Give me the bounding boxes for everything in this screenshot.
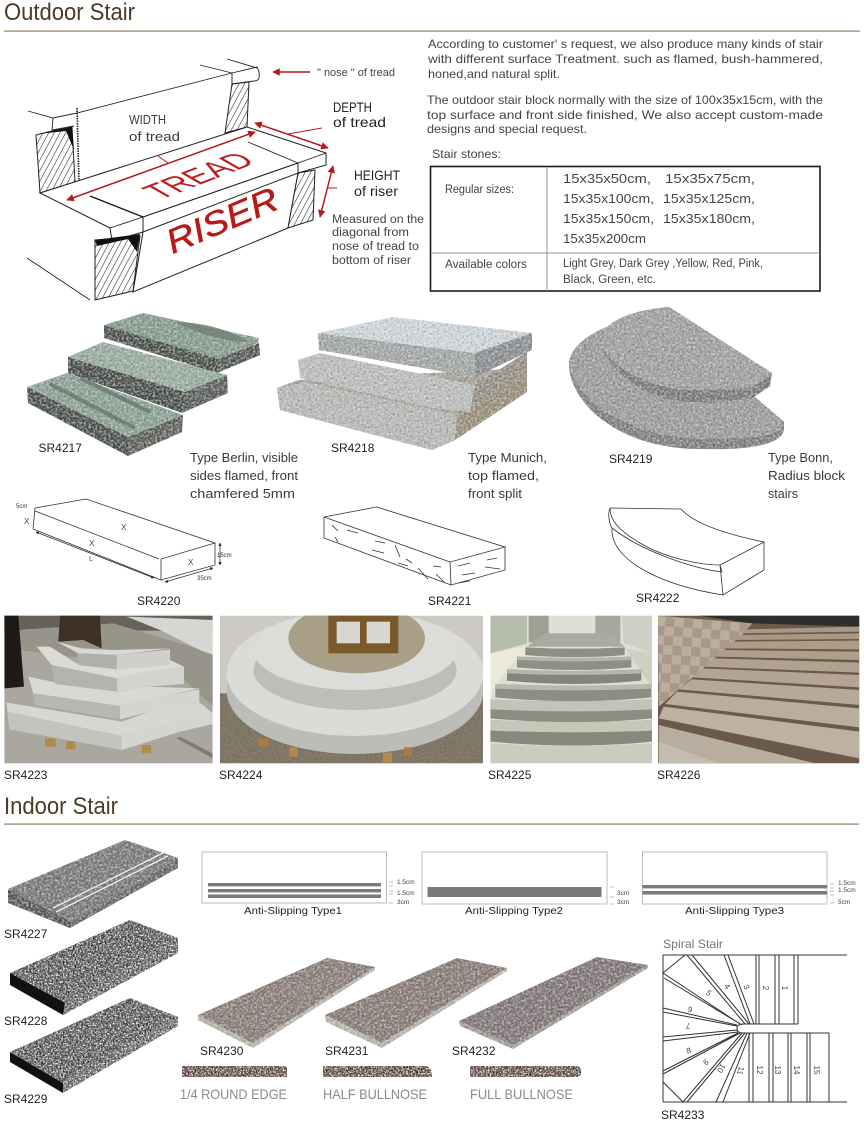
stair plan lines (663, 955, 847, 1102)
callout: depth of tread (333, 99, 386, 130)
edge profile: half bullnose (323, 1066, 432, 1102)
photo: SR4227 tread with anti-slip lines (8, 840, 178, 928)
photo: SR4223 stepped stair assembly (4, 616, 213, 763)
text block: surface treatments (427, 37, 823, 81)
table: stair stone sizes and colors: 15x35x100cm, (563, 191, 654, 206)
label: SR4226: SR4226 (657, 768, 701, 782)
photo: SR4230 brown tread (198, 958, 375, 1048)
photo: SR4228 dark speckled tread (10, 920, 178, 1015)
photo: SR4224 curved stair assembly (220, 603, 483, 763)
label: SR4217: SR4217 (38, 441, 82, 455)
diagram: Anti-Slipping Type2: 3cm (617, 899, 629, 906)
step numbers: 8 (685, 1045, 692, 1055)
edge profile: half bullnose: HALF BULLNOSE (323, 1086, 427, 1102)
caption: Type Munich (468, 450, 547, 501)
label: SR4228: SR4228 (4, 1014, 48, 1028)
note: riser measurement: nose of tread to (332, 241, 419, 253)
text block: standard block size: top surface and front side finished, We also accept custom-made (427, 108, 823, 122)
label: SR4223: SR4223 (4, 768, 48, 782)
photo: SR4218 split granite steps (277, 317, 532, 450)
text block: standard block size: The outdoor stair block normally with the size of 100x35x15cm, with the (427, 93, 823, 107)
step numbers: 5 (704, 988, 714, 998)
note: riser measurement (332, 214, 424, 267)
text block: surface treatments: with different surface Treatment. such as flamed, bush-hammered, (427, 52, 823, 66)
drawing: SR4220 chamfered block: 5cm (16, 504, 27, 510)
callout: height of riser (354, 167, 400, 199)
note: riser measurement: diagonal from (332, 227, 409, 239)
drawing: SR4221 split-face block (324, 507, 505, 585)
caption: Type Munich: Type Munich, (468, 450, 547, 465)
caption: Type Bonn: stairs (768, 486, 798, 501)
caption: Type Berlin (190, 450, 298, 501)
photo: SR4231 brown tread (325, 958, 507, 1048)
drawing: SR4220 chamfered block (16, 499, 232, 582)
title: Spiral Stair: Spiral Stair (663, 937, 723, 951)
step numbers: 3 (741, 984, 752, 991)
label: SR4231: SR4231 (325, 1044, 369, 1058)
table: stair stone sizes and colors: 15x35x150cm, (563, 211, 654, 226)
drawing: SR4220 chamfered block: X (188, 558, 194, 567)
caption: Type Bonn: Radius block (768, 468, 846, 483)
step numbers: 1 (780, 986, 789, 991)
label: SR4224: SR4224 (219, 768, 263, 782)
step numbers: 2 (761, 986, 770, 991)
red label: tread: TREAD (135, 148, 264, 204)
step numbers: 11 (735, 1065, 746, 1076)
heading: Indoor Stair: Indoor Stair (4, 793, 118, 820)
step numbers: 14 (792, 1066, 801, 1075)
diagram: Anti-Slipping Type3 (642, 852, 856, 917)
photo: SR4217 green stepped blocks (27, 313, 260, 456)
callout: nose of tread: " nose " of tread (317, 67, 395, 79)
note: riser measurement: Measured on the (332, 214, 424, 226)
label: SR4222: SR4222 (636, 591, 680, 605)
diagram: Anti-Slipping Type3: 1.5cm (838, 880, 856, 887)
stair anatomy diagram (27, 59, 424, 300)
drawing: SR4220 chamfered block: 15cm (217, 553, 232, 559)
caption: Type Berlin: sides flamed, front (190, 468, 298, 483)
diagram: Anti-Slipping Type2: 3cm (617, 890, 629, 897)
text block: surface treatments: According to customer' s request, we also produce many kinds of stair (428, 37, 823, 51)
note: riser measurement: bottom of riser (332, 255, 411, 267)
table: stair stone sizes and colors: Black, Green, etc. (563, 274, 656, 286)
table: stair stone sizes and colors: 15x35x180cm, (663, 211, 755, 226)
photo: SR4225 split-face curved steps (490, 616, 652, 763)
label: SR4232: SR4232 (452, 1044, 496, 1058)
label: SR4227: SR4227 (4, 927, 48, 941)
step numbers: 7 (685, 1021, 690, 1030)
step numbers: 9 (701, 1057, 710, 1067)
caption: Type Munich: top flamed, (468, 468, 539, 483)
photo: SR4226 tan granite staircase (658, 616, 859, 763)
table: stair stone sizes and colors: Regular sizes: (445, 184, 514, 196)
table: stair stone sizes and colors (430, 166, 820, 291)
callout: depth of tread: of tread (333, 114, 386, 130)
diagram: Anti-Slipping Type3: 1.5cm (838, 887, 856, 894)
table: stair stone sizes and colors: Light Grey, Dark Grey ,Yellow, Red, Pink, (563, 258, 763, 270)
diagram: stair line drawing (27, 59, 337, 300)
diagram: Anti-Slipping Type2 (422, 852, 629, 917)
edge profile: 1/4 round edge: 1/4 ROUND EDGE (180, 1086, 287, 1102)
callout: width of tread: of tread (129, 129, 180, 144)
diagram: Anti-Slipping Type1: 1.5cm (397, 890, 415, 897)
step numbers: 10 (715, 1062, 727, 1075)
diagram: Anti-Slipping Type1: Anti-Slipping Type1 (244, 906, 342, 917)
step numbers: 4 (722, 982, 732, 991)
label: SR4219: SR4219 (609, 452, 653, 466)
drawing: SR4220 chamfered block: X (121, 523, 127, 532)
text block: standard block size: designs and special request. (427, 122, 587, 136)
label: SR4218: SR4218 (331, 441, 375, 455)
drawing: SR4220 chamfered block: X (24, 517, 30, 526)
text block: surface treatments: honed,and natural split. (428, 67, 560, 81)
label: SR4225: SR4225 (488, 768, 532, 782)
caption: Type Munich: front split (468, 486, 522, 501)
text block: standard block size (427, 93, 823, 136)
diagram: Anti-Slipping Type2: Anti-Slipping Type2 (465, 906, 563, 917)
caption: Type Bonn (768, 450, 846, 501)
step numbers: 15 (812, 1066, 821, 1075)
label: SR4229: SR4229 (4, 1092, 48, 1106)
step numbers (685, 982, 821, 1076)
diagram: Anti-Slipping Type3: 5cm (838, 899, 850, 906)
table: stair stone sizes and colors: 15x35x200cm (563, 231, 646, 246)
diagram: Anti-Slipping Type3: Anti-Slipping Type3 (685, 906, 785, 917)
edge profile: 1/4 round edge (180, 1066, 287, 1102)
callout: height of riser: HEIGHT (354, 167, 400, 183)
table: stair stone sizes and colors: 15x35x75cm, (665, 171, 755, 186)
photo: SR4232 brown tread (459, 957, 648, 1049)
caption: Type Berlin: Type Berlin, visible (190, 450, 298, 465)
step numbers: 12 (755, 1066, 764, 1075)
edge profile: full bullnose: FULL BULLNOSE (470, 1086, 573, 1102)
table: stair stone sizes and colors: 15x35x50cm, (563, 171, 651, 186)
callout: depth of tread: DEPTH (333, 99, 372, 115)
drawing: SR4220 chamfered block: 35cm (197, 576, 212, 582)
callout: width of tread (129, 112, 180, 144)
diagram: Anti-Slipping Type1: 1.5cm (397, 879, 415, 886)
drawing: SR4222 curved block (609, 508, 764, 595)
step numbers: 6 (686, 1004, 694, 1014)
label: SR4230: SR4230 (200, 1044, 244, 1058)
drawing: SR4220 chamfered block: X (89, 539, 95, 548)
photo: SR4229 dark speckled tread (10, 998, 178, 1093)
label: SR4221: SR4221 (428, 594, 472, 608)
callout: width of tread: WIDTH (129, 112, 166, 127)
table: stair stone sizes and colors: Available colors (445, 259, 527, 271)
diagram: spiral stair plan (663, 937, 847, 1102)
subheading: stair stones: Stair stones: (432, 147, 501, 161)
label: SR4233: SR4233 (661, 1108, 705, 1122)
label: SR4220: SR4220 (137, 594, 181, 608)
drawing: SR4220 chamfered block: L (89, 556, 93, 563)
callout: height of riser: of riser (354, 183, 398, 199)
caption: Type Bonn: Type Bonn, (768, 450, 833, 465)
table: stair stone sizes and colors: 15x35x125cm, (663, 191, 755, 206)
red label: riser: RISER (161, 180, 284, 261)
diagram: Anti-Slipping Type1: 3cm (397, 899, 409, 906)
caption: Type Berlin: chamfered 5mm (190, 486, 295, 501)
photo: SR4219 radius blocks (569, 307, 784, 449)
diagram: Anti-Slipping Type1 (202, 852, 415, 917)
step numbers: 13 (773, 1066, 782, 1075)
edge profile: full bullnose (470, 1066, 581, 1102)
